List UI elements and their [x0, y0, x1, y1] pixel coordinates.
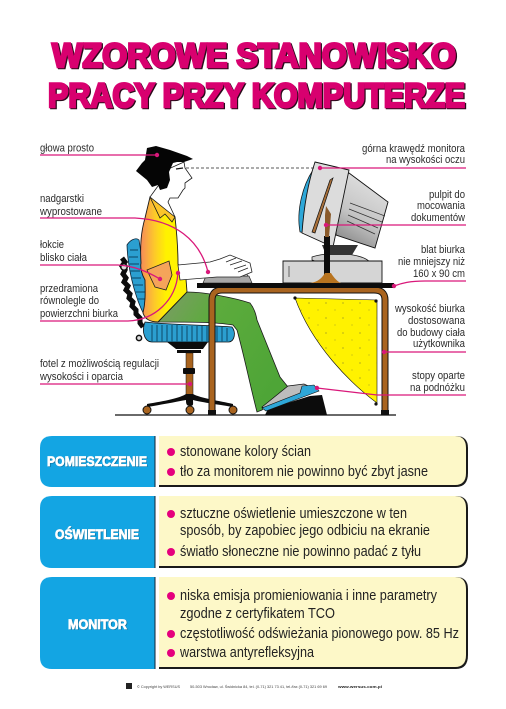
keyboard: [203, 273, 252, 283]
leg: [158, 292, 319, 412]
panel: pomieszczenie: [40, 436, 468, 487]
label: przedramiona równolegle: równolegle do: [40, 295, 99, 307]
label: górna krawędź monitora: górna krawędź monitora: [362, 143, 466, 155]
label: głowa prosto: [40, 142, 159, 157]
heading: oświetlenie: OŚWIETLENIE: [55, 525, 139, 542]
desk top: [197, 283, 394, 288]
list: oświetlenie: sposób, by zapobiec jego odbiciu na ekranie: [180, 522, 430, 539]
head: [136, 146, 193, 217]
list: monitor: częstotliwość odświeżania pionowego pow. 85 Hz: [180, 625, 459, 642]
monitor: [283, 162, 388, 283]
label: fotel: wysokości i oparcia: [39, 371, 124, 383]
icon: publisher logo: [126, 683, 132, 689]
label: przedramiona równolegle: powierzchni biurka: [40, 308, 119, 320]
title: [48, 37, 466, 116]
arm and hand: [178, 255, 252, 280]
title: PRACY PRZY KOMPUTERZE: [49, 78, 466, 116]
list: oświetlenie: sztuczne oświetlenie umieszczone w ten: [180, 505, 407, 522]
title: PRACY PRZY KOMPUTERZE: [48, 77, 465, 115]
label: wysokość biurka: do budowy ciała: [397, 327, 466, 339]
label: łokcie blisko ciała: [40, 239, 162, 281]
list: monitor: niska emisja promieniowania i inne parametry: [180, 587, 437, 604]
label: wysokość biurka: dostosowana: [408, 315, 466, 327]
footer: 50-503 Wrocław, ul. Świdnicka 84, tel. (0-71) 321 73 41, tel./fax (0-71) 321 69 69: [190, 684, 328, 689]
list: monitor: zgodne z certyfikatem TCO: [180, 605, 335, 622]
label: wysokość biurka: [382, 303, 466, 354]
list: oświetlenie: światło słoneczne nie powinno padać z tyłu: [180, 543, 421, 560]
heading: pomieszczenie: POMIESZCZENIE: [47, 453, 147, 469]
footer: © Copyright by WERSUS: [137, 684, 180, 689]
label: pulpit do mocowania dokumentów: mocowania: [417, 200, 466, 212]
label: stopy oparte na podnóżku: [315, 370, 466, 395]
label: stopy oparte na podnóżku: na podnóżku: [410, 382, 465, 394]
desk frame: [208, 290, 389, 415]
list: pomieszczenie: tło za monitorem nie powinno być zbyt jasne: [180, 463, 428, 480]
label: fotel: fotel z możliwością regulacji: [40, 358, 159, 370]
label: blat biurka: [392, 244, 466, 288]
label: głowa prosto: głowa prosto: [40, 142, 94, 154]
shirt and torso: [141, 197, 187, 322]
desk modesty panel: [293, 296, 378, 406]
label: blat biurka: 160 x 90 cm: [413, 268, 465, 280]
workstation illustration: [115, 146, 396, 415]
label: nadgarstki wyprostowane: wyprostowane: [39, 206, 102, 218]
label: przedramiona równolegle: [40, 271, 180, 321]
label: fotel: [39, 358, 192, 386]
label: pulpit do mocowania dokumentów: [324, 189, 466, 227]
chair: [121, 239, 237, 414]
title: WZOROWE STANOWISKO: [52, 37, 456, 75]
panel: monitor: [40, 577, 468, 669]
label: górna krawędź monitora: [318, 143, 466, 170]
label: łokcie blisko ciała: łokcie: [40, 239, 64, 251]
footrest: [265, 395, 327, 415]
label: górna krawędź monitora: na wysokości oczu: [386, 154, 465, 166]
label: łokcie blisko ciała: blisko ciała: [40, 252, 88, 264]
dashed eye line: [186, 167, 314, 169]
label: pulpit do mocowania dokumentów: dokumentów: [411, 212, 465, 224]
heading: oświetlenie: OŚWIETLENIE: [56, 526, 140, 543]
label: przedramiona równolegle: przedramiona: [40, 283, 99, 295]
floor line: [115, 414, 396, 416]
heading: pomieszczenie: POMIESZCZENIE: [48, 454, 148, 470]
list: monitor: [167, 587, 459, 661]
label: wysokość biurka: użytkownika: [413, 338, 466, 350]
label: blat biurka: nie mniejszy niż: [398, 256, 465, 268]
label: stopy oparte na podnóżku: stopy oparte: [412, 370, 465, 382]
panel: oświetlenie: [40, 496, 468, 568]
footer: [126, 683, 382, 689]
label: wysokość biurka: wysokość biurka: [394, 303, 466, 315]
label: nadgarstki wyprostowane: nadgarstki: [40, 193, 84, 205]
heading: monitor: MONITOR: [69, 617, 128, 633]
label: blat biurka: blat biurka: [421, 244, 466, 256]
label: pulpit do mocowania dokumentów: pulpit do: [429, 189, 465, 201]
label: nadgarstki wyprostowane: [39, 193, 210, 274]
title: WZOROWE STANOWISKO: [53, 38, 457, 76]
list: monitor: warstwa antyrefleksyjna: [179, 644, 315, 661]
footer: www.wersus.com.pl: [337, 684, 382, 689]
list: pomieszczenie: [167, 443, 428, 480]
heading: monitor: MONITOR: [68, 616, 127, 632]
list: oświetlenie: [167, 505, 430, 560]
list: pomieszczenie: stonowane kolory ścian: [180, 443, 311, 460]
